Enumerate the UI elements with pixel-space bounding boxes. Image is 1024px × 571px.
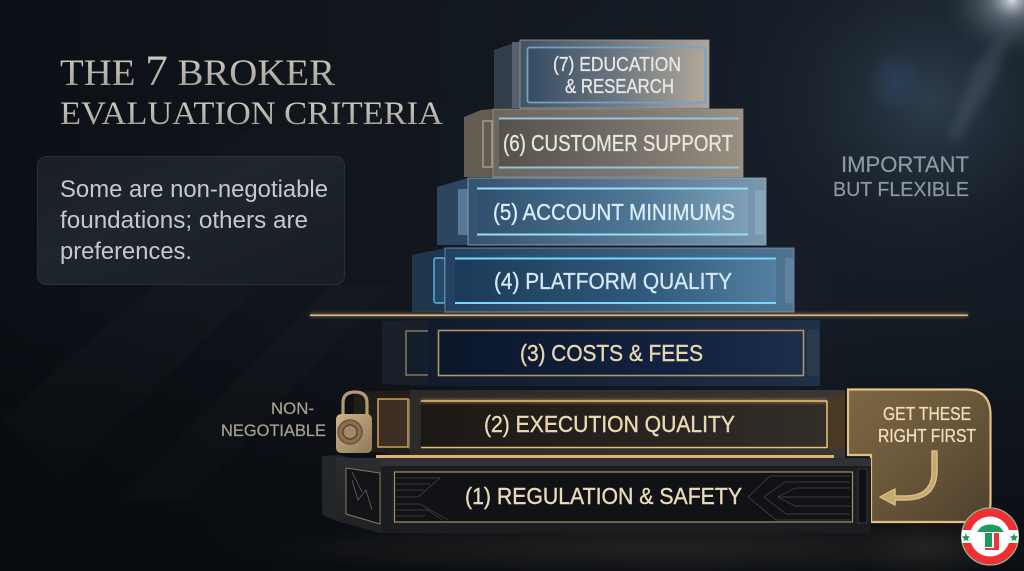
floor reflection bbox=[220, 516, 1024, 571]
callout text: foundations; others are bbox=[60, 207, 308, 234]
callout: get these right first: GET THESE bbox=[883, 404, 971, 424]
logo bbox=[962, 508, 1018, 565]
tier 7: education and research: & RESEARCH bbox=[565, 75, 674, 98]
lens flare bbox=[869, 0, 1024, 140]
tier 6: customer support: (6) CUSTOMER SUPPORT bbox=[503, 130, 733, 156]
tier 7: education and research: (7) EDUCATION bbox=[553, 53, 681, 76]
callout: get these right first bbox=[848, 390, 990, 522]
title: EVALUATION CRITERIA bbox=[60, 96, 443, 132]
icon: curved return arrow bbox=[880, 451, 937, 505]
tier 5: account minimums: (5) ACCOUNT MINIMUMS bbox=[493, 199, 735, 225]
circuit pattern bbox=[396, 476, 850, 520]
tier 2: execution quality bbox=[354, 390, 845, 458]
tier 4: platform quality bbox=[412, 248, 794, 312]
tier 4: platform quality: (4) PLATFORM QUALITY bbox=[494, 268, 732, 294]
gold divider line bbox=[310, 313, 968, 317]
tier 7: education and research bbox=[494, 40, 709, 108]
tier 1: regulation and safety bbox=[322, 455, 871, 533]
tier 2: execution quality: (2) EXECUTION QUALITY bbox=[484, 411, 735, 437]
callout text bbox=[60, 176, 328, 265]
tier 6: customer support bbox=[464, 109, 743, 177]
label: non-negotiable bbox=[221, 399, 326, 440]
tier 1: regulation and safety: (1) REGULATION & SAFETY bbox=[465, 483, 742, 509]
icon: padlock bbox=[336, 392, 372, 453]
callout panel bbox=[38, 156, 344, 284]
tier 3: costs and fees bbox=[382, 320, 820, 386]
callout text: preferences. bbox=[60, 238, 192, 265]
label: important but flexible: IMPORTANT bbox=[841, 152, 969, 177]
label: non-negotiable: NEGOTIABLE bbox=[221, 421, 326, 440]
tier 5: account minimums bbox=[437, 178, 766, 245]
title: THE 7 BROKER bbox=[60, 48, 335, 95]
label: non-negotiable: NON- bbox=[271, 399, 314, 418]
callout text: Some are non-negotiable bbox=[60, 176, 328, 203]
callout: get these right first: RIGHT FIRST bbox=[878, 426, 976, 446]
title bbox=[60, 48, 443, 132]
label: important but flexible bbox=[833, 152, 969, 201]
label: important but flexible: BUT FLEXIBLE bbox=[833, 179, 969, 201]
tier 3: costs and fees: (3) COSTS & FEES bbox=[520, 340, 703, 366]
